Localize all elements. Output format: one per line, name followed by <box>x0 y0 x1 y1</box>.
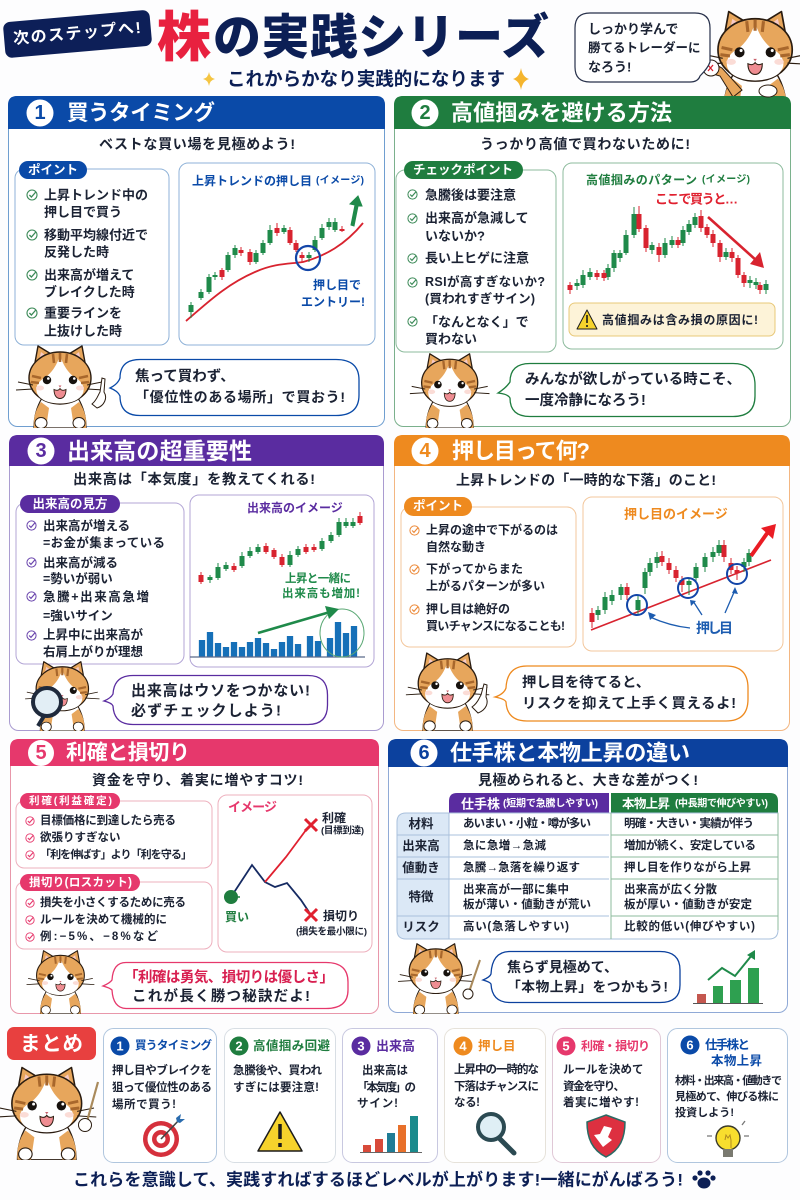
summary card 2 <box>224 1028 336 1162</box>
box: take profit: 利確(利益確定) <box>29 794 112 807</box>
summary card 2: すぎには要注意! <box>233 1080 319 1094</box>
speech bubble 2: 一度冷静になろう! <box>525 391 646 409</box>
comparison table: リスク <box>402 920 440 934</box>
subheading 6: 見極められると、大きな差がつく! <box>478 772 698 788</box>
box: points <box>15 161 169 345</box>
subheading 5: 資金を守り、着実に増やすコツ! <box>92 772 303 788</box>
box: checkpoints: チェックポイント <box>413 162 513 177</box>
speech bubble 3 <box>104 676 328 724</box>
volume ellipse <box>320 609 364 657</box>
panel 4: what is a pullback <box>394 435 790 731</box>
cat: top right <box>702 12 800 110</box>
comparison table: 高い(急落しやすい) <box>463 919 569 933</box>
header 3: 出来高の超重要性 <box>67 438 252 464</box>
summary card 6: 本物上昇 <box>711 1053 762 1068</box>
box: checkpoints: 急騰後は要注意 <box>425 188 516 202</box>
chart: volume image: 出来高のイメージ <box>247 500 343 515</box>
summary card 3: 3 <box>357 1038 365 1054</box>
chart: image of profit vs loss: 買い <box>225 910 249 924</box>
summary card 4: 下落はチャンスに <box>454 1079 539 1093</box>
header 5: 利確と損切り <box>66 742 190 764</box>
box: points: 出来高が増えて <box>44 268 134 282</box>
speech bubble 5: これが長く勝つ秘訣だよ! <box>132 987 310 1005</box>
comparison table: 出来高が一部に集中 <box>463 882 569 896</box>
speech bubble: top: 勝てるトレーダーに <box>588 40 701 55</box>
header 2 <box>394 96 791 129</box>
summary card 5: 資金を守り、 <box>563 1079 625 1093</box>
summary card 6: 6 <box>686 1038 694 1052</box>
box: points: 上がるパターンが多い <box>426 578 545 593</box>
box: checkpoints <box>396 161 556 352</box>
box: how to read volume: =お金が集まっている <box>43 535 165 550</box>
box: points: ポイント <box>413 498 463 513</box>
box: how to read volume: 出来高が増える <box>43 518 130 533</box>
summary card 5: ルールを決めて <box>563 1062 644 1076</box>
summary card 1: 場所で買う! <box>112 1097 176 1111</box>
summary card 3: 出来高 <box>376 1038 415 1054</box>
header 5 <box>10 739 379 766</box>
chart: image of profit vs loss <box>218 795 372 952</box>
summary card 6: 投資しよう! <box>675 1105 734 1119</box>
box: points: 買いチャンスになることも! <box>426 619 565 633</box>
header 4: 押し目って何? <box>452 438 590 464</box>
summary card 2: 高値掴み回避 <box>253 1038 330 1053</box>
icon: paw <box>692 1170 716 1188</box>
chart: image of profit vs loss: 利確 <box>322 810 346 825</box>
title: 株 <box>157 8 211 68</box>
footer message: これらを意識して、実践すればするほどレベルが上がります!一緒にがんばろう! <box>73 1170 683 1190</box>
highlight circle <box>296 246 320 270</box>
box: stop loss: 例:−5%、−8%など <box>40 929 158 943</box>
pullback label: 押し目 <box>696 620 733 636</box>
comparison table: 増加が続く、安定している <box>624 838 756 852</box>
header 1: 1 <box>34 102 46 124</box>
chart: pullback in uptrend: エントリー! <box>301 295 365 309</box>
header 6: 仕手株と本物上昇の違い <box>450 740 690 766</box>
warning note: 高値掴みは含み損の原因に! <box>602 312 758 327</box>
box: checkpoints: 「なんとなく」で <box>425 314 529 330</box>
speech bubble 2: みんなが欲しがっている時こそ、 <box>525 370 741 388</box>
box: take profit <box>16 793 212 868</box>
summary card 5: 着実に増やす! <box>563 1095 639 1109</box>
summary card 6: 材料・出来高・値動きで <box>675 1073 782 1087</box>
cat paw on panel edge <box>759 85 777 97</box>
box: how to read volume: 右肩上がりが理想 <box>43 644 144 659</box>
chart: top-buying pattern <box>563 163 783 349</box>
icon: rising bars <box>693 950 763 1004</box>
box: how to read volume: =勢いが弱い <box>43 571 113 586</box>
chart: image of profit vs loss: (損失を最小限に) <box>296 926 367 938</box>
summary card 5: 利確・損切り <box>581 1038 650 1053</box>
pullback circles <box>627 564 747 615</box>
summary card 1: 1 <box>116 1038 124 1054</box>
box: points: ポイント <box>28 162 78 177</box>
volume bars <box>202 622 354 657</box>
speech bubble 5 <box>103 962 348 1008</box>
speech bubble 6: 焦らず見極めて、 <box>507 959 618 975</box>
subheading 1: ベストな買い場を見極めよう! <box>99 136 295 152</box>
summary card 4: 上昇中の一時的な <box>454 1062 539 1076</box>
box: take profit: 欲張りすぎない <box>40 830 120 844</box>
summary card 4 <box>444 1028 546 1162</box>
summary card 2: 急騰後や、買われ <box>233 1063 322 1077</box>
comparison table: 本物上昇 <box>622 796 670 811</box>
summary card 5: 5 <box>562 1038 570 1054</box>
speech bubble 1: 焦って買わず、 <box>135 367 235 385</box>
comparison table: 押し目を作りながら上昇 <box>624 860 752 874</box>
header 4 <box>394 435 790 466</box>
speech bubble 6 <box>483 952 680 1002</box>
summary card 4: 4 <box>459 1038 467 1054</box>
chart: pullback in uptrend: 上昇トレンドの押し目 <box>192 173 312 188</box>
comparison table: 出来高が広く分散 <box>624 882 718 896</box>
summary card 1 <box>104 1028 216 1162</box>
summary card 4: 押し目 <box>478 1038 516 1053</box>
subheading 4: 上昇トレンドの「一時的な下落」のこと! <box>456 472 716 488</box>
box: how to read volume: 急騰+出来高急増 <box>43 589 149 604</box>
pullback label <box>648 587 738 636</box>
subheading 2: うっかり高値で買わないために! <box>480 136 690 152</box>
summary card 3: 出来高は <box>362 1063 408 1077</box>
comparison table: 明確・大きい・実績が伴う <box>624 816 754 830</box>
box: points: 移動平均線付近で <box>44 228 148 242</box>
summary label: まとめ <box>20 1032 83 1056</box>
panel 1: buy timing <box>8 96 385 428</box>
comparison table: 値動き <box>402 860 440 875</box>
cat 5 <box>27 951 94 1014</box>
comparison table: (短期で急騰しやすい) <box>503 796 598 810</box>
comparison table: (中長期で伸びやすい) <box>675 796 768 810</box>
box: points <box>401 497 576 647</box>
comparison table <box>397 793 778 939</box>
panel 6: manipulated stocks vs real rise <box>388 739 788 1014</box>
cat 4 <box>406 653 489 731</box>
comparison table: 急に急増→急減 <box>463 838 546 852</box>
chart: pullback in uptrend <box>179 163 375 345</box>
chart: top-buying pattern: 高値掴みのパターン <box>586 172 697 187</box>
summary card 6: 仕手株と <box>705 1037 750 1052</box>
icon: bars <box>360 1116 422 1152</box>
box: points: 反発した時 <box>44 244 109 260</box>
box: points: 下がってからまた <box>426 561 523 576</box>
chart: image of profit vs loss: イメージ <box>228 800 277 814</box>
speech bubble: top: しっかり学んで <box>588 22 678 36</box>
chart: pullback image <box>583 497 783 651</box>
comparison table: 仕手株 <box>461 796 500 812</box>
cat 1 <box>16 346 106 428</box>
icon: light bulb <box>707 1121 749 1157</box>
speech bubble 4 <box>495 666 748 721</box>
summary cat <box>0 1068 98 1160</box>
chart: image of profit vs loss: (目標到達) <box>321 824 364 836</box>
badge: next step: 次のステップへ! <box>12 19 141 48</box>
chart: volume image: 上昇と一緒に <box>285 571 351 585</box>
box: checkpoints: いないか? <box>425 228 485 244</box>
icon: magnifier <box>478 1114 514 1153</box>
subheading 3: 出来高は「本気度」を教えてくれる! <box>73 471 315 488</box>
warning note <box>569 303 775 336</box>
summary card 3: サイン! <box>357 1097 398 1110</box>
speech bubble: top: なろう! <box>588 60 631 74</box>
box: stop loss <box>16 874 212 949</box>
speech bubble 6: 「本物上昇」をつかもう! <box>507 978 668 994</box>
summary card 3 <box>342 1028 438 1162</box>
panel 5: take profit and stop loss <box>10 739 379 1014</box>
summary card 1: 押し目やブレイクを <box>112 1063 212 1077</box>
summary card 5 <box>552 1028 660 1162</box>
box: points: 上昇トレンド中の <box>44 188 148 202</box>
panel 2: avoiding buying the top <box>394 96 791 428</box>
title: の実践シリーズ <box>213 10 549 64</box>
cat 2 <box>410 354 490 428</box>
box: stop loss: ルールを決めて機械的に <box>40 912 167 926</box>
comparison table: 比較的低い(伸びやすい) <box>624 919 755 933</box>
summary label <box>7 1027 96 1060</box>
box: points: 上抜けした時 <box>44 324 122 338</box>
speech bubble 1 <box>110 360 359 416</box>
big red arrow <box>751 532 768 556</box>
chart: volume image <box>190 495 374 667</box>
header 3 <box>9 435 384 466</box>
comparison table: あいまい・小粒・噂が多い <box>463 816 591 830</box>
summary card 4: なる! <box>454 1096 480 1109</box>
box: take profit: 「利を伸ばす」より「利を守る」 <box>40 847 192 861</box>
chart: image of profit vs loss: 損切り <box>323 908 359 923</box>
icon: shield <box>587 1115 625 1157</box>
chart: pullback image: 押し目のイメージ <box>624 506 728 522</box>
icon: target <box>143 1114 185 1157</box>
speech bubble 5: 「利確は勇気、損切りは優しさ」 <box>124 968 334 986</box>
box: how to read volume: 出来高が減る <box>43 555 118 570</box>
chart: top-buying pattern: ここで買うと… <box>655 192 738 206</box>
box: how to read volume: =強いサイン <box>43 608 113 623</box>
summary card 1: 狙って優位性のある <box>112 1080 212 1094</box>
speech bubble 2 <box>498 364 755 416</box>
summary card 6: 見極めて、伸びる株に <box>675 1089 779 1103</box>
subtitle: これからかなり実践的になります <box>227 68 505 90</box>
header 1: 買うタイミング <box>67 100 215 125</box>
box: checkpoints: RSIが高すぎないか? <box>425 274 545 289</box>
box: how to read volume <box>16 495 184 664</box>
chart: pullback in uptrend: (イメージ) <box>316 174 364 186</box>
speech bubble 3: 必ずチェックしよう! <box>131 702 281 720</box>
box: stop loss: 損失を小さくするために売る <box>40 895 186 909</box>
summary card 3: 「本気度」の <box>357 1080 416 1094</box>
speech bubble 4: リスクを抑えて上手く買えるよ! <box>522 694 736 712</box>
box: points: 重要ラインを <box>44 306 122 320</box>
box: points: 押し目は絶好の <box>426 601 510 616</box>
header 3: 3 <box>35 440 47 462</box>
badge: next step <box>3 10 152 58</box>
summary card 2: 2 <box>235 1038 243 1054</box>
box: checkpoints: (買われすぎサイン) <box>425 291 535 306</box>
arrow up <box>350 196 362 226</box>
header 2: 高値掴みを避ける方法 <box>451 100 672 126</box>
summary card 1: 買うタイミング <box>135 1038 212 1052</box>
speech bubble 1: 「優位性のある場所」で買おう! <box>135 389 345 405</box>
speech bubble: top <box>575 13 710 82</box>
chart: pullback in uptrend: 押し目で <box>313 277 361 292</box>
icon: warning <box>258 1112 302 1151</box>
volume arrow <box>258 612 330 633</box>
cat 3 with magnifier <box>25 662 99 731</box>
chart: top-buying pattern: (イメージ) <box>702 174 750 186</box>
box: checkpoints: 出来高が急減して <box>425 210 529 226</box>
box: points: ブレイクした時 <box>44 284 135 300</box>
comparison table: 板が厚い・値動きが安定 <box>624 897 752 911</box>
arrow down <box>708 217 757 261</box>
speech bubble 4: 押し目を待てると、 <box>522 673 650 691</box>
panel 3: volume <box>9 435 384 731</box>
box: take profit: 目標価格に到達したら売る <box>40 813 176 827</box>
box: checkpoints: 買わない <box>425 332 477 346</box>
comparison table: 特徴 <box>408 889 434 904</box>
box: points: 上昇の途中で下がるのは <box>426 522 558 537</box>
header 1 <box>8 96 385 129</box>
box: points: 自然な動き <box>426 539 486 554</box>
comparison table: 出来高 <box>402 838 440 853</box>
header 2: 2 <box>419 102 431 124</box>
comparison table: 材料 <box>408 816 434 831</box>
header 6: 6 <box>418 742 430 764</box>
box: stop loss: 損切り(ロスカット) <box>29 875 132 889</box>
chart: volume image: 出来高も増加! <box>282 586 360 600</box>
header 6 <box>388 739 788 767</box>
header 4: 4 <box>419 440 431 462</box>
cat 6 with pointer <box>398 944 480 1014</box>
summary card 6 <box>668 1028 788 1162</box>
speech bubble 3: 出来高はウソをつかない! <box>131 682 310 700</box>
comparison table: 急騰→急落を繰り返す <box>463 860 580 874</box>
box: how to read volume: 上昇中に出来高が <box>43 627 144 642</box>
box: checkpoints: 長い上ヒゲに注意 <box>425 250 529 266</box>
header 5: 5 <box>35 742 47 764</box>
box: how to read volume: 出来高の見方 <box>32 496 108 511</box>
comparison table: 板が薄い・値動きが荒い <box>463 897 591 911</box>
box: points: 押し目で買う <box>44 204 122 220</box>
